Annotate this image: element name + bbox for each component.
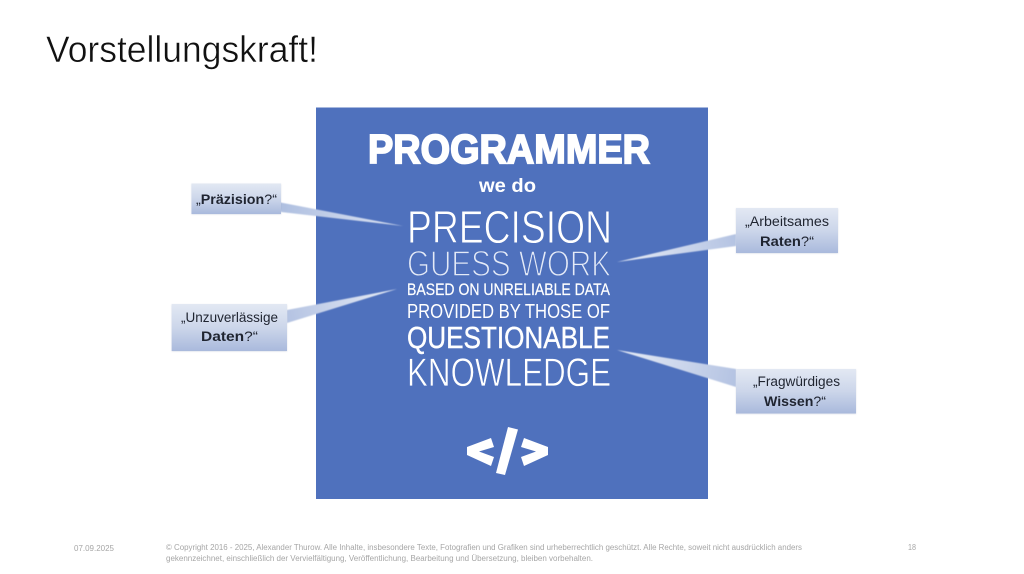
callout: Präzision [192, 184, 281, 214]
arrow: Fragwürdiges Wissen pointer [617, 350, 736, 387]
callout: Fragwürdiges Wissen: Wissen?“ [764, 394, 826, 409]
callout: Unzuverlässige Daten: „Unzuverlässige [181, 310, 278, 325]
footer: copyright notice: © Copyright 2016 - 2025, Alexander Thurow. Alle Inhalte, insbesondere Texte, Fotografien und Grafiken sind urheberrechtlich geschützt. Alle Rechte, soweit nicht ausdrücklich anders [166, 543, 802, 552]
callout: Unzuverlässige Daten [172, 304, 287, 351]
footer: page number: 18 [908, 543, 916, 552]
text: GUESS WORK: GUESS WORK [407, 243, 611, 284]
callout: Arbeitsames Raten: „Arbeitsames [745, 214, 829, 229]
footer: date: 07.09.2025 [74, 544, 115, 553]
callout: Fragwürdiges Wissen [736, 369, 856, 414]
icon: code tag [467, 427, 548, 475]
footer: copyright notice [166, 543, 802, 563]
arrow: Präzision pointer [278, 202, 403, 226]
callout: Arbeitsames Raten [736, 208, 838, 253]
text: QUESTIONABLE: QUESTIONABLE [407, 320, 610, 355]
title: Vorstellungskraft! [46, 29, 318, 70]
text: KNOWLEDGE: KNOWLEDGE [407, 351, 611, 395]
text: PROVIDED BY THOSE OF: PROVIDED BY THOSE OF [407, 301, 610, 323]
callout: Arbeitsames Raten: Raten ?“ [760, 234, 814, 249]
heading: PROGRAMMER: PROGRAMMER [368, 126, 650, 172]
arrow: Arbeitsames Raten pointer [617, 234, 736, 262]
text: PRECISION: PRECISION [407, 201, 612, 253]
arrow: Unzuverlässige Daten pointer [287, 289, 397, 323]
callout: Fragwürdiges Wissen: „Fragwürdiges [753, 374, 840, 389]
text: BASED ON UNRELIABLE DATA: BASED ON UNRELIABLE DATA [407, 280, 611, 299]
text: we do: we do [478, 176, 536, 197]
footer: copyright notice: gekennzeichnet, einschließlich der Vervielfältigung, Veröffentlichung, Bearbeitung und Übersetzung, bleiben vorbehalten. [166, 554, 593, 563]
callout: Präzision: „Präzision ?“ [196, 192, 277, 207]
panel: programmer poster [316, 108, 708, 499]
callout: Unzuverlässige Daten: Daten ?“ [201, 329, 258, 344]
